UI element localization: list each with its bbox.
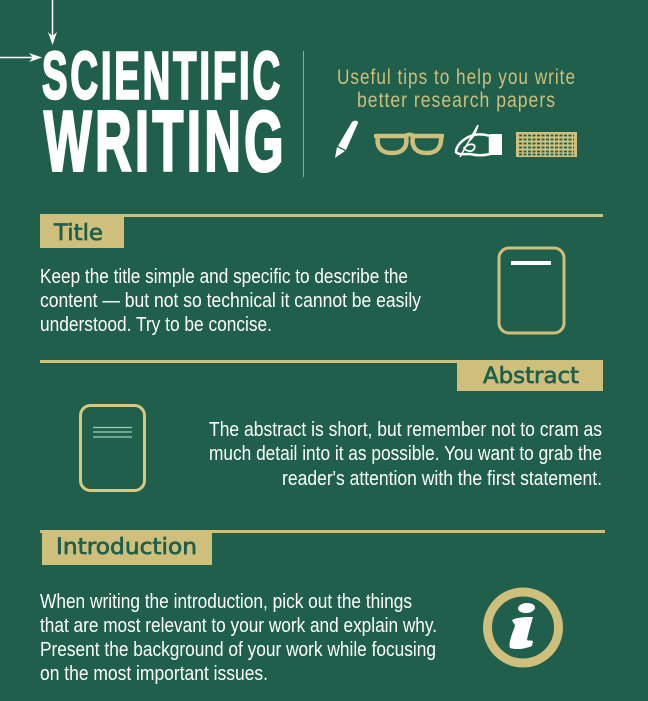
- label: introduction: Introduction: [56, 535, 197, 560]
- text: abstract advice: The abstract is short, but remember not to cram as: [209, 419, 602, 441]
- title: [42, 38, 287, 190]
- text: title advice: [40, 266, 421, 336]
- text: introduction advice: Present the background of your work while focusing: [40, 639, 436, 661]
- arrow: vertical pointer: [48, 0, 57, 45]
- section: introduction: [40, 530, 605, 565]
- subtitle: better research papers: [357, 89, 556, 112]
- text: title advice: content — but not so technical it cannot be easily: [40, 290, 421, 312]
- arrow: horizontal pointer: [0, 53, 42, 62]
- icon: hand writing: [456, 125, 502, 157]
- text: introduction advice: [40, 591, 437, 685]
- text: title advice: understood. Try to be concise.: [40, 314, 272, 336]
- label: introduction: [42, 532, 212, 565]
- icon: pen: [335, 121, 358, 158]
- subtitle: [337, 66, 576, 112]
- subtitle: Useful tips to help you write: [337, 66, 576, 89]
- text: abstract advice: reader's attention with the first statement.: [282, 468, 602, 490]
- section: abstract: [40, 360, 603, 391]
- text: title advice: Keep the title simple and specific to describe the: [40, 266, 408, 288]
- label: title: [40, 217, 124, 248]
- title: SCIENTIFIC: [42, 38, 283, 114]
- header divider: [303, 51, 304, 177]
- title: WRITING: [44, 94, 287, 190]
- section: title: [40, 214, 603, 248]
- text: introduction advice: When writing the introduction, pick out the things: [40, 591, 412, 613]
- icon: glasses: [374, 134, 444, 153]
- icon: information: [488, 592, 558, 663]
- label: abstract: [457, 361, 603, 391]
- text: abstract advice: [209, 419, 602, 490]
- text: introduction advice: on the most important issues.: [40, 663, 268, 685]
- icon: keyboard: [516, 132, 577, 157]
- text: introduction advice: that are most relevant to your work and explain why.: [40, 615, 437, 637]
- label: title: Title: [53, 221, 103, 246]
- label: abstract: Abstract: [483, 364, 579, 389]
- icon: title page: [499, 248, 564, 333]
- icon: abstract page: [80, 406, 144, 490]
